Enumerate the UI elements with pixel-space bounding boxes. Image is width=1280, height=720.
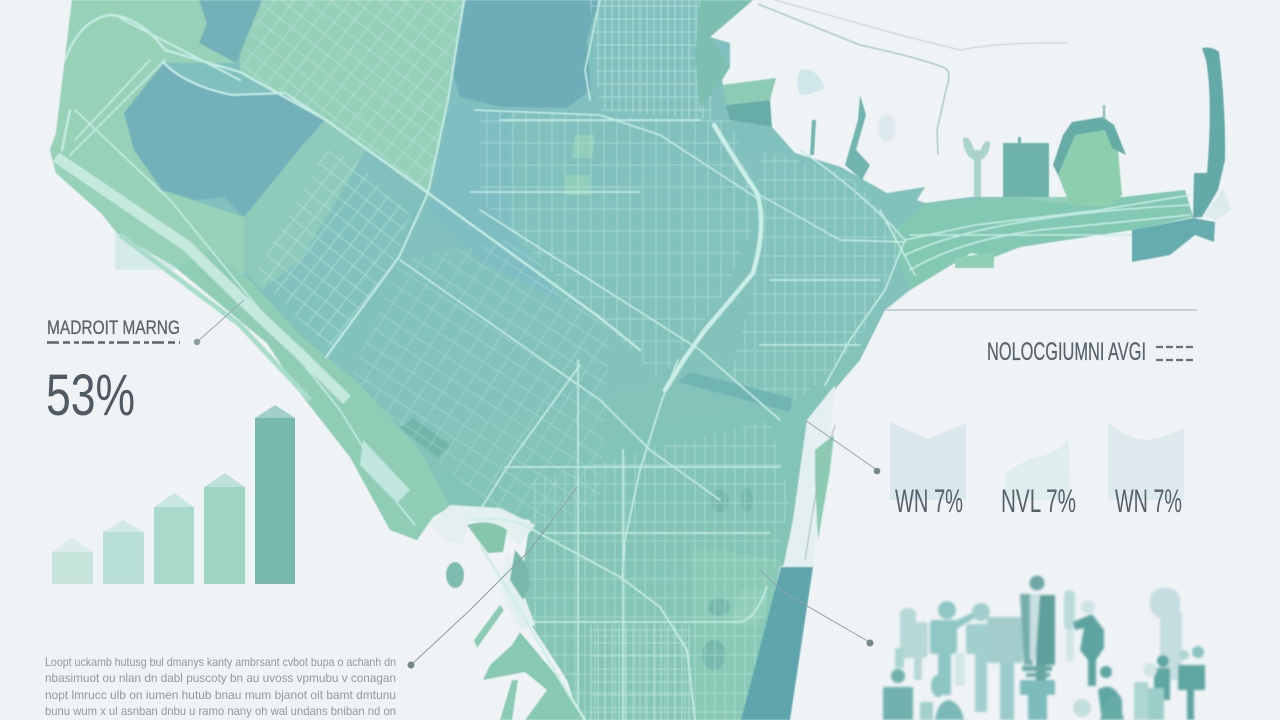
delta road [470,519,585,720]
street grid: diagonal south [255,150,410,350]
mini stat 1 [890,422,966,519]
mini stat 1: WN 7% [895,483,963,519]
delta pond right [510,550,530,600]
coastal pale strip [56,157,347,400]
street grid: diagonal north [240,0,464,193]
leader line [197,300,244,342]
bar 3 [154,493,194,584]
crowd callout [760,570,874,646]
pale green parcels [565,135,767,625]
east green overlay [890,190,1193,290]
pale figure left [900,608,928,680]
central teal zone [430,105,560,300]
crowd callout dot [866,640,874,646]
pale coastal rectangle [115,232,177,270]
street grid: east district [730,150,905,400]
pale right figures [1134,650,1189,720]
small northern lake [199,0,262,63]
dark teal parcel west [400,418,450,458]
green landmark [1058,130,1122,207]
harbor dark block [726,100,772,127]
stat callout dot [874,468,880,474]
right divider [885,309,1197,311]
right teal figures [1098,646,1205,720]
pale head [1081,600,1095,614]
block building [1003,137,1049,197]
callout: left header [47,300,244,345]
heading: MADROIT MARNG [47,318,180,339]
line 4: bunu wum x ul asnban dnbu u ramo nany oh wal undans bniban nd on [45,704,396,718]
harbor green river [695,0,753,110]
north harbor [695,0,1068,180]
pale jetty [1204,188,1231,220]
south land fingers [483,632,585,720]
lower figure [1100,695,1124,720]
column beside center [1000,663,1014,720]
bar 4 [204,473,245,584]
harbor inlets [810,95,870,180]
small figures left [920,675,964,720]
mini stat 2 [1001,438,1076,519]
heading dashes [1156,347,1196,360]
delta pale channels [430,505,535,630]
pale pond [798,69,825,95]
transit lines [758,4,949,155]
east shoreline [741,385,835,720]
crowd callout line [760,570,871,643]
harbor pier column [1193,48,1225,218]
street grid: central west [350,240,610,525]
mini stat 3: WN 7% [1115,483,1182,519]
line 3: nopt lmrucc ulb on iumen hutub bnau mum bjanot oit bamt dmtunu [45,688,396,702]
center stripes [1022,666,1052,677]
channel line [805,425,835,560]
main lake [124,63,324,217]
delta island [467,522,507,553]
stat callout line [805,420,877,470]
pale thin figure [1064,590,1075,662]
east green strip [815,435,834,540]
lower left figure [883,669,913,720]
green diagonal district [240,0,464,193]
leader dot [194,339,200,345]
southeast green overlay [690,545,782,720]
bar chart [52,405,295,584]
winding river [665,125,761,390]
spire [1103,105,1105,120]
pale smudge [878,114,896,142]
mini stat 3 [1108,422,1184,519]
mini stats [805,420,1184,519]
dark park ovals [702,488,753,670]
body text block [45,487,577,718]
green northwest district [50,0,350,420]
street grid: central north [480,110,760,380]
leaning teal figure [1073,614,1104,686]
lower pier block [1132,218,1215,262]
callout dot south [408,662,414,668]
lower center head [1073,699,1091,717]
middle cluster [987,617,1023,685]
delta background water [430,545,580,720]
green wedge [955,252,994,268]
heading text: NOLOCGIUMNI AVGI [987,338,1146,366]
harbor green block [722,78,776,105]
line 2: nbasimuot ou nlan dn dabl puscoty bn au uvoss vpmubu v conagan [45,671,396,685]
street grid: south central [530,420,790,720]
pale coastal parcel [360,440,410,503]
pale channel [783,385,835,568]
dark teal parcel east [678,372,792,412]
bar 1 [52,538,93,584]
callout line south [411,487,577,665]
bar 5 [255,405,295,584]
river delta [430,505,585,720]
slim pillar [895,648,904,668]
heading underline [47,341,180,344]
north central lake [452,0,599,108]
waterfront skyline [955,48,1231,268]
center bottom figure [1020,680,1055,720]
big stat: 53% [46,363,135,428]
landmark dark top [1053,117,1126,175]
figure with raised arm left [930,601,978,695]
bay water [741,567,813,720]
green coastal band [175,250,450,540]
pale back figure right [1150,588,1182,680]
callout: right heading [987,338,1196,366]
tower stem [963,138,990,197]
street grid: south dense [590,625,695,720]
figure second left [955,603,994,712]
people crowd [883,576,1205,720]
street grid: north dense [590,0,715,120]
tall central figure [1020,576,1055,690]
line 1: Loopt uckamb hutusg bul dmanys kanty ambrsant cvbot bupa o achanh dn [45,655,396,669]
green southwest district [244,120,366,290]
delta pond left [446,562,464,588]
bar 2 [103,520,144,584]
mini stat 2: NVL 7% [1001,483,1076,519]
